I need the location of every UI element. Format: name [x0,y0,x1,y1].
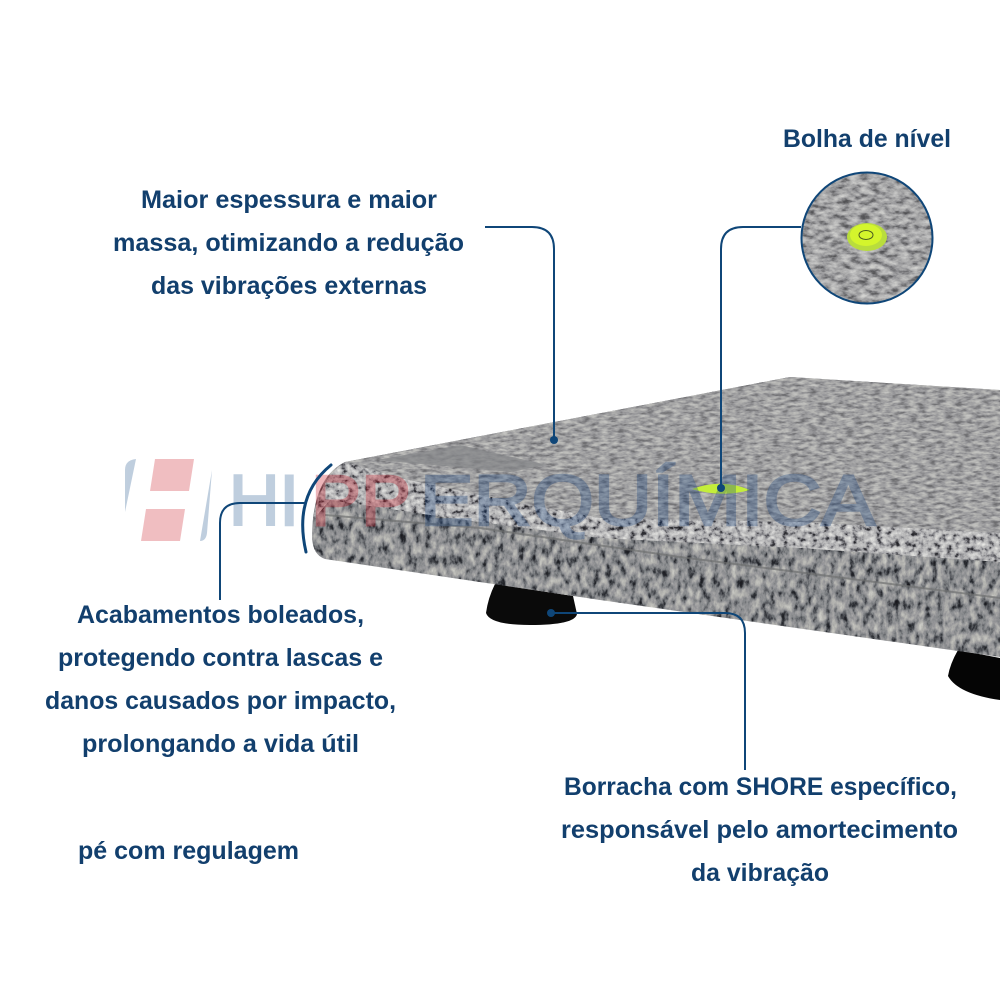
slab front face [300,370,1000,670]
callout line: rounded edge [220,465,331,600]
watermark word HI: HI [229,462,299,541]
level bubble on slab [692,484,750,494]
callout line: bubble [717,227,801,492]
label: thickness: massa, otimizando a redução [113,229,464,257]
label: rounded edges [45,601,396,758]
label: rubber: da vibração [691,859,829,887]
label: rubber [561,773,958,887]
label: rounded edges: Acabamentos boleados, [77,601,364,629]
inset border [802,172,932,304]
label: bolha de nivel: Bolha de nível [783,125,951,153]
callout line: rubber foot [547,609,745,770]
label: adjustable foot: pé com regulagem [78,837,299,865]
label: thickness: das vibrações externas [151,272,427,300]
watermark [125,459,876,541]
slab top surface [340,370,1000,540]
watermark logo mark [125,459,212,541]
inset bubble [847,223,887,251]
foot right [948,650,1000,700]
slab seam line [325,515,1000,598]
inset circle: bubble level [800,171,934,305]
label: rubber: Borracha com SHORE específico, [564,773,957,801]
grey stripe on top surface [377,445,547,472]
label: rubber: responsável pelo amortecimento [561,816,958,844]
label: rounded edges: danos causados por impacto, [45,687,396,715]
watermark word PP: PP [311,462,411,541]
label: thickness [113,186,464,300]
foot left [486,584,577,625]
label: thickness: Maior espessura e maior [141,186,437,214]
slab rounded bevel [313,462,1000,562]
inset granite [800,171,934,305]
feet: rubber feet [486,584,1000,700]
label: rounded edges: prolongando a vida útil [82,730,359,758]
label: rounded edges: protegendo contra lascas e [58,644,383,672]
watermark word ERQUÍMICA: ERQUÍMICA [420,462,876,541]
granite slab [300,370,1000,670]
callout line: thickness [485,227,558,444]
